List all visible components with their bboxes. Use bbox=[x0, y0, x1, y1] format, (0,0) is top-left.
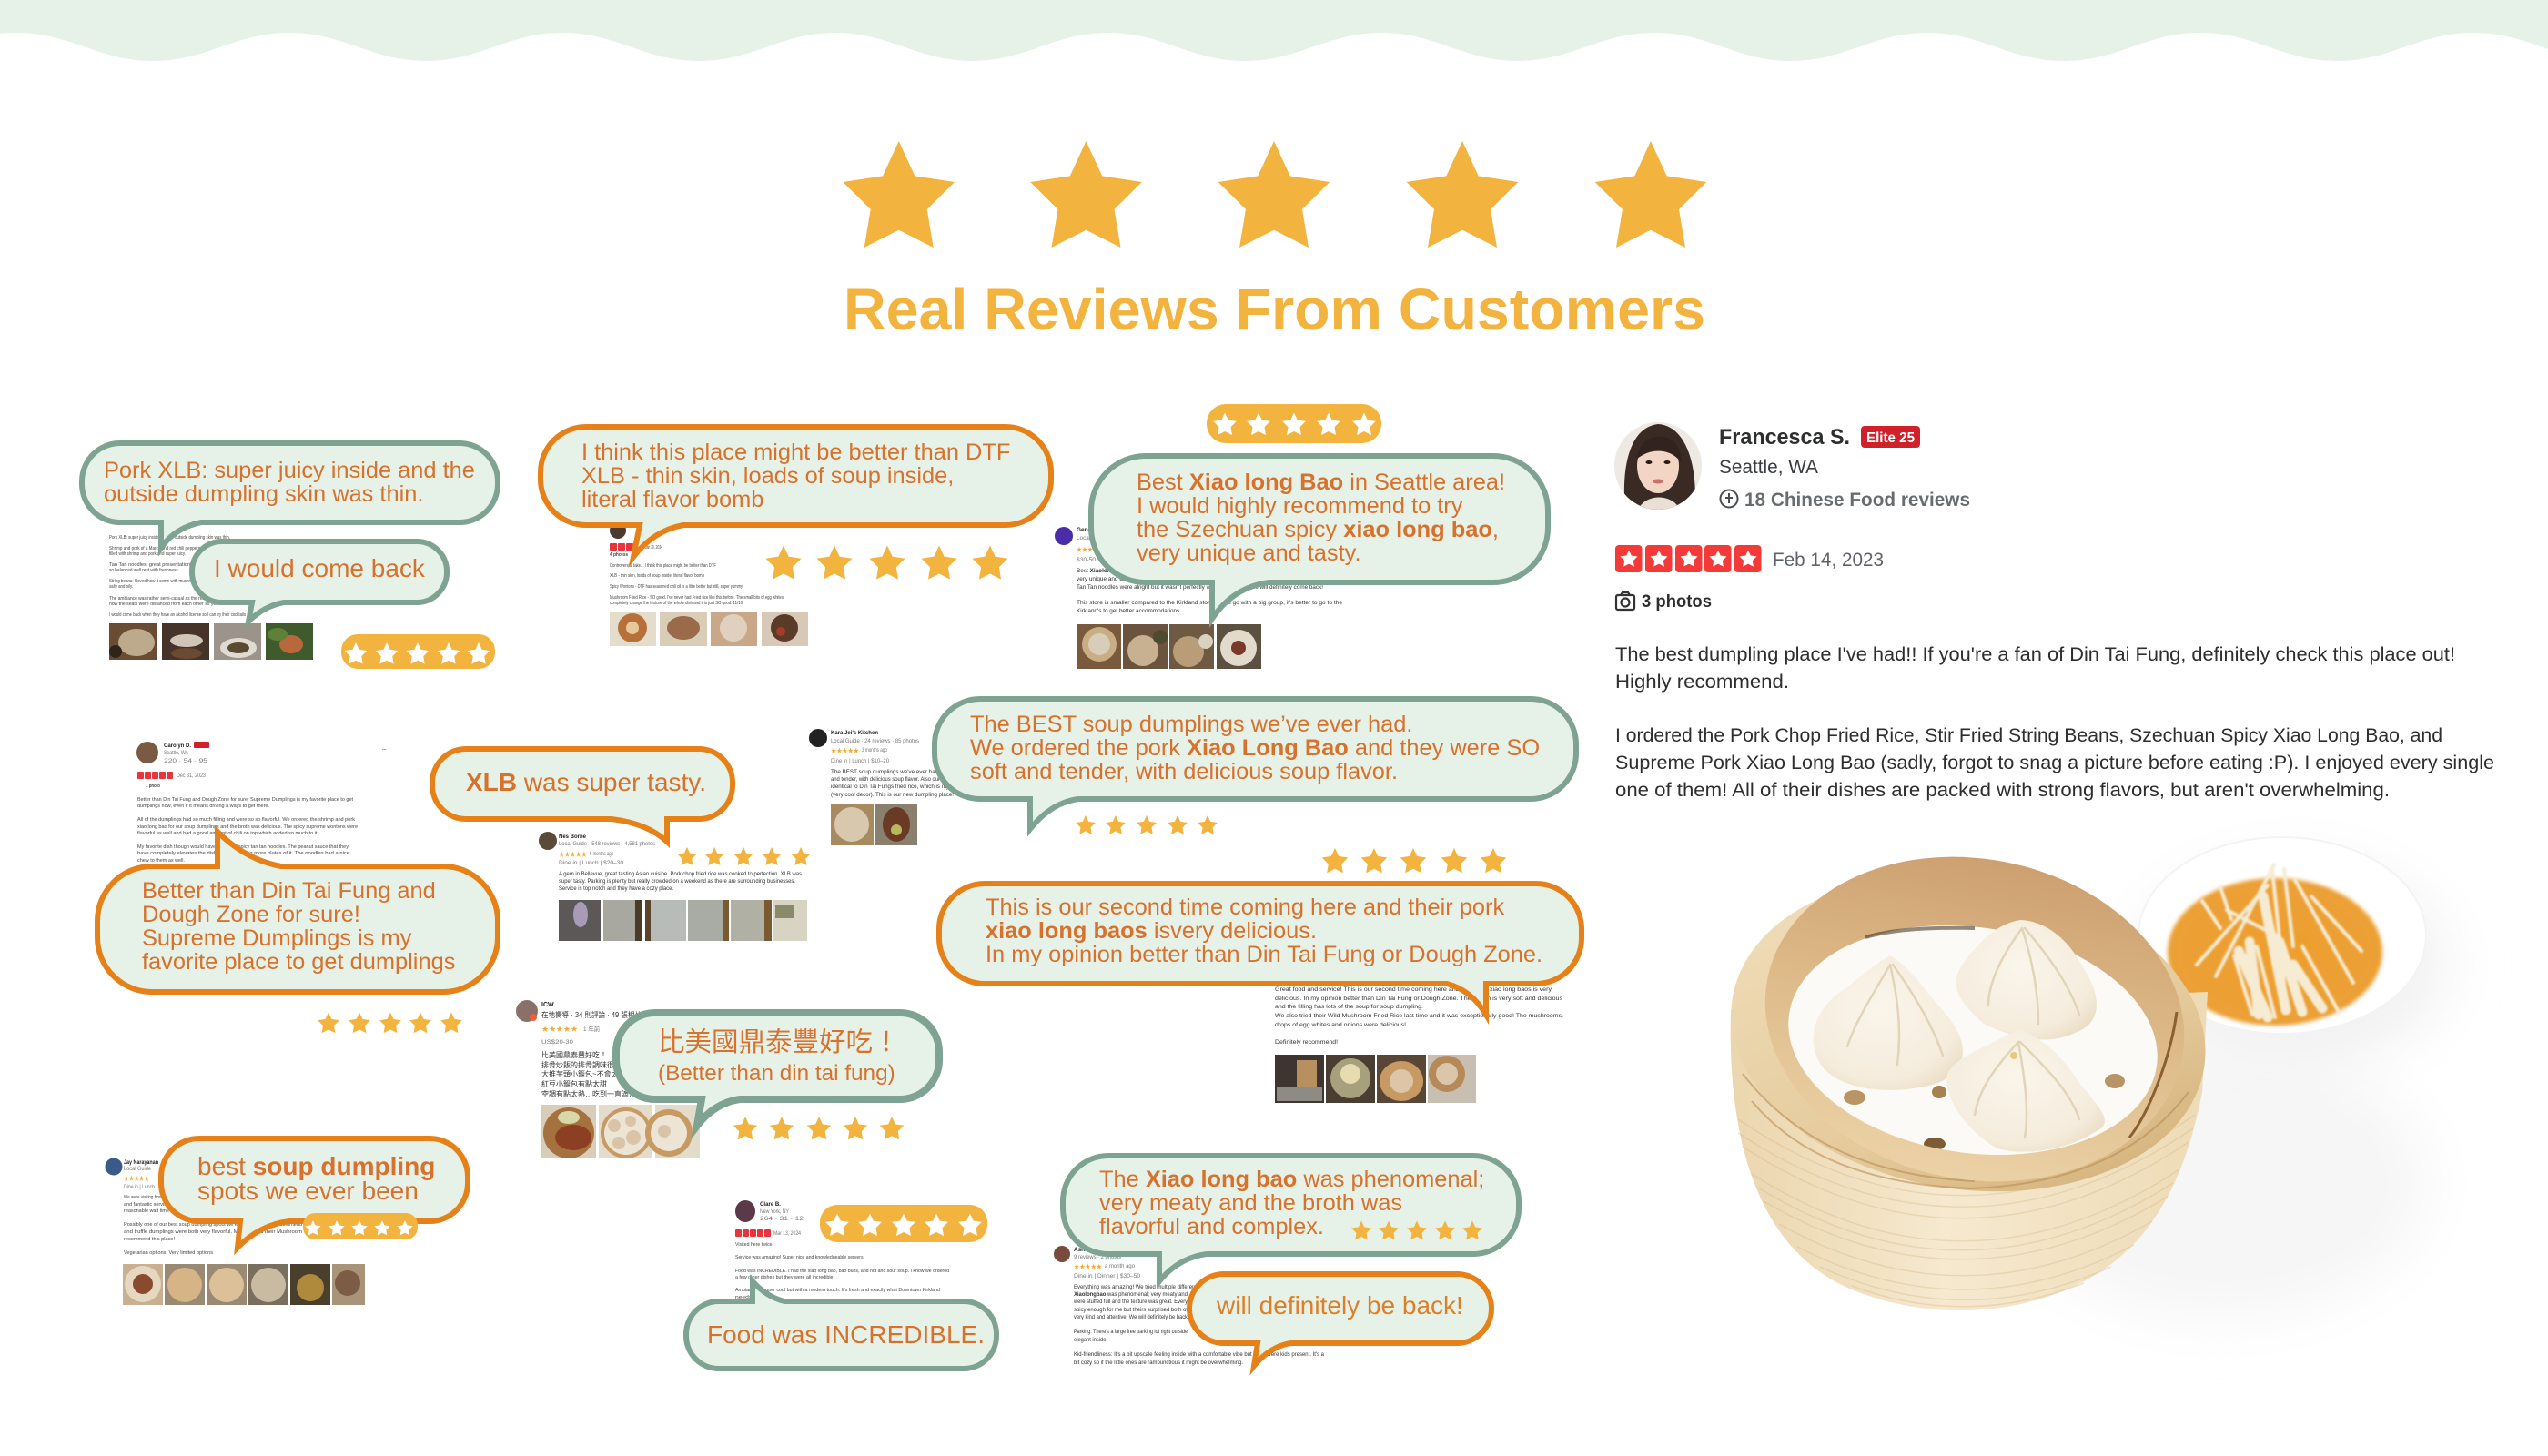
steamer outer rim bbox=[1711, 844, 2226, 1221]
review card: Jay Narayanan: ★★★★★ bbox=[124, 1175, 149, 1182]
review card: ICW: 大推芋頭小籠包~不會太甜 bbox=[541, 1069, 626, 1078]
review body text bbox=[1615, 642, 2494, 801]
review card: Kara Jei's Kitchen: Dine in | Lunch | $10–20 bbox=[831, 758, 889, 764]
review card: Carolyn D.: flavorful as well and had a good amount of chili on top which added so much to it. bbox=[137, 831, 318, 836]
icon: camera bbox=[1616, 592, 1634, 610]
review card: Ashley local reviewer: a month ago bbox=[1105, 1263, 1135, 1269]
review card: Jay Narayanan: recommend this place! bbox=[124, 1237, 176, 1242]
star row: second time review bbox=[1322, 848, 1506, 873]
review card: Carolyn D.: 1 photo bbox=[146, 784, 161, 789]
review card: Clare B.: Mar 13, 2024 bbox=[774, 1230, 801, 1237]
speech bubble: will definitely be back: will definitely be back! bbox=[1216, 1291, 1463, 1320]
review card: thin skin reviewer: Controversial take... I think this place might be better than DTF bbox=[610, 563, 717, 569]
review card: Jay Narayanan: reasonable wait time bbox=[124, 1208, 169, 1214]
speech bubble: second time: This is our second time coming here and their pork bbox=[986, 895, 1504, 920]
star row: phenomenal review bbox=[1351, 1221, 1482, 1239]
review card: Kara Jei's Kitchen: and tender, with delicious soup flavor. Also our bbox=[831, 776, 941, 783]
speech bubble: phenomenal: The Xiao long bao was phenomenal; bbox=[1099, 1167, 1484, 1192]
review card: Gene local guide: Kirkland's to get better accommodations. bbox=[1077, 608, 1181, 614]
review count: 18 Chinese Food reviews bbox=[1744, 489, 1970, 511]
review card: Jay Narayanan: We were visiting from out bbox=[124, 1195, 169, 1200]
review photos bbox=[109, 623, 313, 660]
review card: Carolyn D.: chew to them as well. bbox=[137, 858, 185, 864]
speech bubble: second time: xiao long baos isvery delicious. bbox=[986, 918, 1317, 944]
reviewer location: Seattle, WA bbox=[1719, 457, 1818, 478]
review card: Pork XLB reviewer: Shrimp and pork of a Marco and red chili peppers bbox=[109, 546, 200, 551]
speech bubble: I would come back: I would come back bbox=[214, 554, 426, 582]
review body text: I ordered the Pork Chop Fried Rice, Stir Fried String Beans, Szechuan Spicy Xiao Long Bao, and bbox=[1615, 723, 2442, 746]
review card: Pork XLB reviewer: salty and oily. bbox=[109, 584, 133, 590]
review card: ICW: 排骨炒飯的排骨調味很好 bbox=[541, 1060, 622, 1069]
review card: ICW: 空調有點太熱…吃到一直滴汗 bbox=[541, 1089, 636, 1098]
speech bubble: best soup dumpling: spots we ever been bbox=[197, 1177, 419, 1205]
review card: Jay Narayanan: Possibly one of our best soup dumpling spots we ever been. Highly recommend bbox=[124, 1222, 302, 1228]
review card: Kara Jei's Kitchen: 3 months ago bbox=[862, 747, 887, 753]
review card: ICW: 紅豆小籠包有點太甜 bbox=[541, 1079, 607, 1088]
review photos bbox=[1077, 624, 1261, 669]
review card: Gene local guide bbox=[1055, 527, 1342, 669]
review card: thin skin reviewer: completely change the texture of the whole dish and it is just SO good. 11/10 bbox=[610, 601, 743, 606]
review card: Jay Narayanan: and truffle dumplings were both very flavorful. Must try and their Mushroom bbox=[124, 1229, 303, 1235]
review card: thin skin reviewer bbox=[610, 522, 808, 646]
speech bubble: best xiao long bao: very unique and tasty. bbox=[1137, 541, 1361, 566]
review card: Ashley local reviewer: elegant inside. bbox=[1074, 1337, 1107, 1343]
speech bubble: Food was INCREDIBLE bbox=[686, 1281, 996, 1369]
review card: thin skin reviewer: 4 photos bbox=[610, 552, 628, 558]
speech bubble: Pork XLB: outside dumpling skin was thin. bbox=[104, 481, 423, 507]
steamer inner wall bbox=[1737, 822, 2212, 1217]
review card: Jay Narayanan: Dine in | Lunch bbox=[124, 1184, 155, 1190]
speech bubble: best xiao long bao bbox=[1091, 456, 1548, 619]
review card: Nes Borne: Service is top notch and they have a cozy place. bbox=[559, 885, 673, 892]
dumpling bbox=[1946, 1029, 2105, 1152]
speech bubble: better than DTF: I think this place might be better than DTF bbox=[581, 440, 1010, 465]
review photos bbox=[1275, 1055, 1476, 1103]
review card: Ashley local reviewer: Everything was amazing! We tried multiple different bbox=[1074, 1284, 1197, 1290]
steamer body bbox=[1731, 992, 2208, 1310]
review card: Nes Borne: ★★★★★ bbox=[559, 851, 587, 858]
review card: Gene local guide: very unique and tasty. bbox=[1077, 576, 1133, 582]
review card: Kara Jei's Kitchen: (very cool decor). This is our new dumpling place! bbox=[831, 792, 954, 798]
speech bubble: best soup dumplings: The BEST soup dumplings we’ve ever had. bbox=[970, 712, 1412, 737]
review card: Pork XLB reviewer: The ambiance was rather semi-casual as the restaurant bbox=[109, 596, 218, 602]
icon: reviewer avatar bbox=[1614, 422, 1702, 510]
review card: Carolyn D.: My favorite dish though would have to be the spicy tan tan noodles. The peanut sauce that they bbox=[137, 844, 349, 850]
star row: best soup dumplings bbox=[1076, 815, 1218, 834]
top wave banner bbox=[0, 0, 2548, 61]
review card: ICW bbox=[516, 1000, 700, 1158]
review card: ICW: 1 年前 bbox=[583, 1025, 601, 1033]
review card: Kara Jei's Kitchen bbox=[809, 729, 954, 845]
review card: Clare B.: a few other dishes but they were all incredible! bbox=[735, 1275, 834, 1280]
title: Real Reviews From Customers bbox=[844, 277, 1705, 342]
speech bubble: better than DTF bbox=[541, 427, 1051, 557]
review body text: Supreme Pork Xiao Long Bao (sadly, forgot to snag a picture before eating :P). I enjoyed every single bbox=[1615, 751, 2494, 774]
review card: Nes Borne: super tasty. Parking is plenty but really crowded on a weekend as there are surrounding businesses. bbox=[559, 878, 795, 885]
photo: soup dumplings in bamboo steamer with ginger dipping sauce bbox=[1711, 822, 2448, 1320]
review card: Nes Borne bbox=[539, 832, 807, 941]
review card: thin skin reviewer: Jan 20, 2024 bbox=[645, 545, 662, 551]
review card: Carolyn D.: dumplings now, even if it means driving a ways to get there. bbox=[137, 804, 269, 809]
review card: Kara Jei's Kitchen: The BEST soup dumplings we've ever had. bbox=[831, 769, 940, 775]
review card: Kara Jei's Kitchen: Kara Jei's Kitchen bbox=[831, 730, 878, 736]
speech bubble: best soup dumplings: We ordered the pork Xiao Long Bao and they were SO bbox=[970, 735, 1540, 761]
review card: Kara Jei's Kitchen: identical to Din Tai Fungs fried rice, which is my bbox=[831, 784, 950, 790]
review photos bbox=[123, 1264, 365, 1305]
review card: Pork XLB reviewer: I would come back when they have an alcohol license so I can try their cocktails bbox=[109, 612, 246, 618]
review card: Clare B. bbox=[735, 1200, 949, 1300]
speech bubble: best soup dumpling bbox=[161, 1138, 468, 1248]
review card: Carolyn D. bbox=[136, 742, 387, 864]
review card: Pork XLB reviewer: String beans: I loved how it come with mushrooms bbox=[109, 579, 200, 584]
review card: Ashley local reviewer: Dine in | Dinner | $30–50 bbox=[1074, 1273, 1140, 1279]
speech bubble: XLB was super tasty bbox=[432, 749, 733, 842]
speech bubble: better than Din Tai Fung and Dough Zone bbox=[97, 832, 498, 992]
review card: Pork XLB reviewer: Tan Tan noodles: great presentation and bbox=[109, 562, 200, 568]
panel: featured Francesca S. review bbox=[1614, 422, 2494, 801]
speech bubble: Pork XLB: Pork XLB: super juicy inside and the bbox=[104, 458, 475, 483]
star pill: first review bbox=[341, 634, 495, 669]
review card: Carolyn D.: All of the dumplings had so much filling and were so so flavorful. We ordered the shrimp and pork bbox=[137, 817, 355, 823]
star row: Din Tai Fung review bbox=[318, 1012, 462, 1033]
review date: Feb 14, 2023 bbox=[1773, 549, 1884, 571]
review card: Gene local guide: Gene bbox=[1077, 527, 1091, 533]
review card: Ashley local reviewer: Kid-friendliness: It's a bit upscale feeling inside with a comfortable vibe but there were kids present. It's a bbox=[1074, 1351, 1324, 1358]
review card: Nes Borne: A gem in Bellevue, great tasting Asian cuisine. Pork chop fried rice was cooked to perfection. XLB was bbox=[559, 871, 802, 877]
speech bubble: Chinese review: 比美國鼎泰豐好吃！ bbox=[658, 1027, 900, 1057]
speech bubble: Chinese review: (Better than din tai fung) bbox=[658, 1061, 895, 1086]
speech bubble: Food was INCREDIBLE: Food was INCREDIBLE. bbox=[707, 1320, 985, 1349]
review card: Ashley local reviewer: Xiaolongbao was phenomenal; very meaty and bbox=[1074, 1291, 1188, 1298]
review card: Ashley local reviewer: spicy enough for me but theirs surprised both of bbox=[1074, 1307, 1188, 1313]
speech bubble: better than Din Tai Fung and Dough Zone: Better than Din Tai Fung and bbox=[142, 878, 436, 904]
review card: Ashley local reviewer: Parking: There's a large free parking lot right outside bbox=[1074, 1329, 1188, 1335]
review card: Great food and service: Great food and service! This is our second time coming here and their pork xiao long baos is very bbox=[1275, 986, 1552, 993]
review card: Kara Jei's Kitchen: ★★★★★ bbox=[831, 747, 859, 754]
speech bubble: will definitely be back bbox=[1189, 1274, 1491, 1366]
review card: Gene local guide: Tan Tan noodles were alright but it wasn't perfectly what I expected. We will definitely come back! bbox=[1077, 584, 1323, 591]
review card: Jay Narayanan: and fantastic service bbox=[124, 1202, 169, 1208]
speech bubble: best soup dumpling: best soup dumpling bbox=[197, 1152, 435, 1180]
speech bubble: phenomenal: flavorful and complex. bbox=[1099, 1214, 1324, 1239]
review card: Nes Borne: Local Guide · 548 reviews · 4,581 photos bbox=[559, 841, 655, 847]
star pill: top center review bbox=[1207, 404, 1381, 443]
speech bubble: phenomenal: very meaty and the broth was bbox=[1099, 1190, 1402, 1216]
review card: Ashley local reviewer: Ashley bbox=[1074, 1247, 1093, 1253]
review photos bbox=[559, 900, 807, 941]
dipping sauce bowl bbox=[2138, 837, 2448, 1069]
review card: Jay Narayanan: Jay Narayanan bbox=[124, 1159, 158, 1166]
speech bubble: better than DTF: XLB - thin skin, loads of soup inside, bbox=[581, 463, 954, 489]
speech bubble: better than Din Tai Fung and Dough Zone: Dough Zone for sure! bbox=[142, 902, 360, 927]
review card: Great food and service: Definitely recommend! bbox=[1275, 1039, 1338, 1046]
speech bubble: better than Din Tai Fung and Dough Zone: Supreme Dumplings is my bbox=[142, 925, 412, 951]
speech bubble: XLB was super tasty: XLB was super tasty. bbox=[466, 768, 706, 796]
speech bubble: best soup dumplings bbox=[935, 699, 1576, 829]
review card: Ashley local reviewer: were stuffed full and the texture was great. Every bbox=[1073, 1299, 1188, 1305]
speech bubble: Chinese review bbox=[616, 1013, 939, 1126]
review card: Pork XLB reviewer: Pork XLB: super juicy inside and the outside dumpling skin was thin. bbox=[109, 535, 230, 541]
speech bubble: second time bbox=[939, 884, 1582, 1015]
dumpling bbox=[1814, 956, 1963, 1090]
review photos bbox=[541, 1105, 700, 1158]
review card: Kara Jei's Kitchen: Local Guide · 24 reviews · 85 photos bbox=[831, 738, 919, 744]
review card: ICW: 在地嚮導 · 34 則評論 · 49 張相片 bbox=[541, 1010, 642, 1019]
star row: second review bbox=[766, 546, 1007, 580]
review card: Clare B.: Clare B. bbox=[760, 1201, 781, 1208]
review card: Carolyn D.: 220 · 54 · 95 bbox=[164, 758, 208, 764]
review card: Great food and service: We also tried their Wild Mushroom Fried Rice last time and it was exceptionally good! The mushrooms, bbox=[1275, 1013, 1563, 1019]
speech bubble: best xiao long bao: I would highly recommend to try bbox=[1137, 493, 1463, 519]
reviewer name: Francesca S. bbox=[1719, 425, 1850, 450]
review card: Ashley local reviewer: bit cozy so if the little ones are rambunctious it might be overwhelming. bbox=[1074, 1360, 1243, 1366]
review card: Clare B.: 264 · 31 · 12 bbox=[760, 1216, 804, 1222]
speech bubble: better than DTF: literal flavor bomb bbox=[581, 487, 763, 512]
review card: ICW: 比美國鼎泰豐好吃！ bbox=[541, 1050, 607, 1059]
review card: Nes Borne: Nes Borne bbox=[559, 834, 586, 840]
review photos bbox=[831, 804, 917, 845]
speech bubble: Pork XLB bbox=[82, 443, 498, 548]
star pill: Clare review bbox=[820, 1205, 987, 1242]
review card: Clare B.: New York, NY bbox=[760, 1208, 790, 1215]
review card: Ashley local reviewer: very kind and attentive. We will definitely be back bbox=[1074, 1314, 1188, 1320]
review card: Clare B.: Food was INCREDIBLE. I had the xiao long bao, bao buns, and hot and sour soup. I know we ordered bbox=[735, 1269, 949, 1274]
review card: Pork XLB reviewer bbox=[109, 535, 313, 660]
review card: Carolyn D.: Dec 31, 2023 bbox=[177, 773, 206, 779]
review card: thin skin reviewer: XLB - thin skin, loads of soup inside, literal flavor bomb bbox=[610, 573, 704, 579]
speech bubble: second time: In my opinion better than Din Tai Fung or Dough Zone. bbox=[986, 942, 1542, 967]
steamer paper and dumplings bbox=[1788, 920, 2158, 1155]
review card: Carolyn D.: Better than Din Tai Fung and Dough Zone for sure! Supreme Dumplings is my favorite place to get bbox=[137, 797, 354, 803]
speech bubble: better than Din Tai Fung and Dough Zone: favorite place to get dumplings bbox=[142, 949, 455, 975]
elite badge bbox=[1861, 426, 1920, 448]
review card: Jay Narayanan bbox=[106, 1158, 365, 1305]
review card: Carolyn D.: Carolyn D. bbox=[164, 743, 191, 749]
review card: thin skin reviewer: Spicy Wontons - DTF has seasoned chili oil is a little better but still, super yummy bbox=[610, 584, 743, 590]
soft table shadow bbox=[2011, 1046, 2430, 1320]
review card: thin skin reviewer: Mushroom Fried Rice - SO good. I've never had Fried rice like this before. The small bits of egg whites bbox=[610, 595, 784, 601]
review card: Great food and service: and the filling has lots of the soup for soup dumpling. bbox=[1275, 1004, 1423, 1010]
star row: Chinese review bbox=[733, 1117, 904, 1139]
review card: Gene local guide: ★★★★★ bbox=[1077, 546, 1104, 553]
star row: XLB review bbox=[678, 847, 810, 865]
speech bubble: best xiao long bao: the Szechuan spicy xiao long bao, bbox=[1137, 517, 1499, 542]
review body text: one of them! All of their dishes are packed with strong flavors, but aren't overwhelming. bbox=[1615, 778, 2390, 801]
review card: Carolyn D.: Seattle, WA bbox=[164, 750, 189, 756]
review card: Clare B.: needs. bbox=[735, 1295, 753, 1300]
review card: Carolyn D.: xiao long bao for our soup dumplings and the broth was delicious. The spicy supreme wontons were bbox=[137, 824, 358, 830]
review card: Clare B.: Ambiance is super cool but with a modern touch. It's fresh and exactly what Downtown Kirkland bbox=[735, 1288, 940, 1293]
review card: Carolyn D.: ... bbox=[382, 746, 387, 752]
review card: Jay Narayanan: Local Guide bbox=[124, 1166, 151, 1172]
speech bubble: best xiao long bao: Best Xiao long Bao in Seattle area! bbox=[1137, 470, 1505, 495]
review card: Carolyn D.: have completely elevates the dish and I'm getting more plates of it. The noodles had a nice bbox=[137, 851, 349, 856]
review card: Ashley local reviewer: 9 reviews · 2 photos bbox=[1074, 1254, 1121, 1260]
five large rating stars bbox=[843, 141, 1706, 248]
review card: ICW: US$20-30 bbox=[541, 1039, 574, 1046]
review card: Jay Narayanan: Vegetarian options: Very limited options bbox=[124, 1250, 213, 1256]
speech bubble: I would come back bbox=[192, 541, 447, 622]
review card: Clare B.: Service was amazing! Super nice and knowledgeable servers. bbox=[735, 1255, 864, 1260]
review card: Ashley local reviewer: ★★★★★ bbox=[1074, 1263, 1102, 1270]
steamer binding bbox=[2129, 1012, 2177, 1138]
review card: Gene local guide: Local Guide bbox=[1077, 535, 1108, 541]
review card: ICW: ★★★★★ bbox=[541, 1026, 578, 1033]
review card: Gene local guide: $30-50 bbox=[1077, 557, 1096, 563]
five red rating stars bbox=[1615, 545, 1762, 572]
review photos bbox=[610, 612, 808, 646]
review card: Nes Borne: 6 months ago bbox=[590, 851, 613, 857]
star pill: soup dumpling review bbox=[303, 1213, 418, 1239]
speech bubble: phenomenal bbox=[1063, 1156, 1519, 1281]
review card: Great food and service bbox=[1275, 986, 1563, 1103]
speech bubble: best soup dumplings: soft and tender, with delicious soup flavor. bbox=[970, 759, 1398, 784]
review card: Ashley local reviewer bbox=[1054, 1246, 1324, 1366]
review card: Gene local guide: This store is smaller compared to the Kirkland store. If you go with a big group, it's better to go to the bbox=[1077, 600, 1342, 606]
review body text: Highly recommend. bbox=[1615, 670, 1789, 693]
review card: Clare B.: Visited here twice. bbox=[735, 1242, 774, 1248]
dumpling bbox=[1956, 920, 2097, 1039]
photo count: 3 photos bbox=[1642, 592, 1712, 612]
review card: Pork XLB reviewer: so balanced well rest with freshness. bbox=[109, 568, 179, 573]
review card: ICW: ICW bbox=[541, 1002, 554, 1008]
review card: Nes Borne: Dine in | Lunch | $20–30 bbox=[559, 860, 623, 866]
review body text: The best dumpling place I've had!! If you're a fan of Din Tai Fung, definitely check this place out! bbox=[1615, 642, 2455, 665]
icon: review pin bbox=[1720, 490, 1738, 508]
review card: Great food and service: delicious. In my opinion better than Din Tai Fung or Dough Zone. The dough is very soft and delicious bbox=[1275, 996, 1562, 1002]
review card: Pork XLB reviewer: filled with shrimp and pork and super juicy. bbox=[109, 551, 186, 557]
review card: Gene local guide: Best Xiaolong Bao bbox=[1077, 568, 1127, 574]
review card: Great food and service: drops of egg whites and onions were delicious! bbox=[1275, 1022, 1406, 1028]
review card: Pork XLB reviewer: how the seats were distanced from each other so you bbox=[109, 602, 218, 607]
elite badge: Elite 25 bbox=[1866, 430, 1915, 446]
